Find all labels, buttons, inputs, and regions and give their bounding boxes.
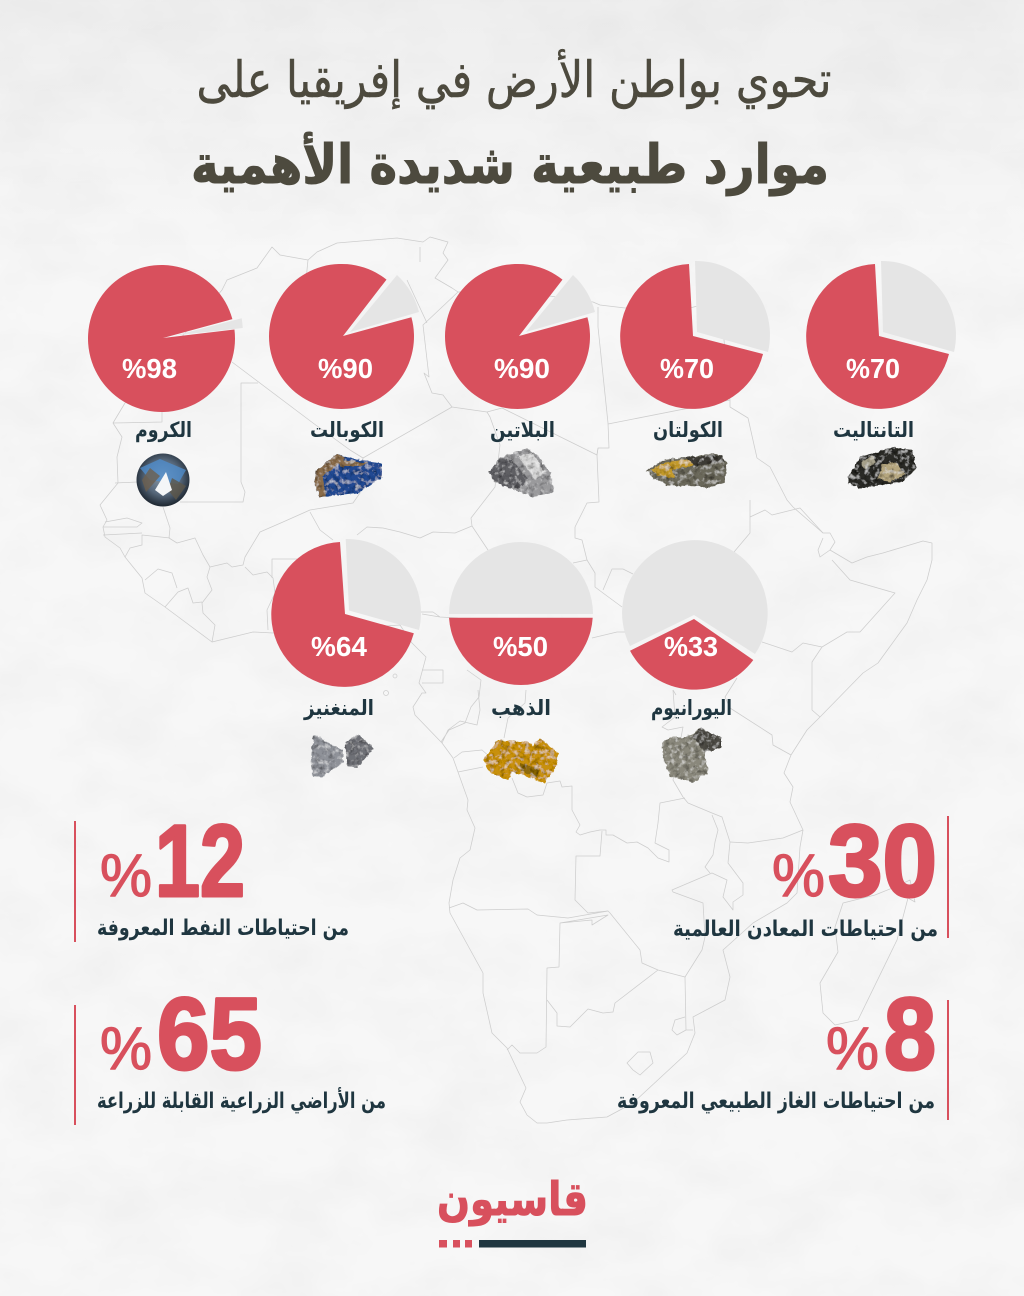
pie: tantalite 70%: %70 (846, 353, 900, 384)
icon: uranium ore (662, 728, 722, 782)
stat: 12% of oil reserves: من احتياطات النفط المعروفة (97, 916, 349, 941)
stat: 12% of oil reserves: % (100, 842, 152, 909)
label: platinum: البلاتين (490, 418, 555, 442)
pie: manganese 64%: %64 (311, 631, 368, 662)
title line 2: موارد طبيعية شديدة الأهمية (191, 132, 829, 196)
pie: platinum 90% (445, 264, 595, 409)
pie: coltan 70% (620, 261, 770, 409)
icon: cobalt ore (314, 454, 382, 497)
label: cobalt: الكوبالت (310, 418, 384, 442)
icon: tantalite ore (848, 447, 917, 488)
stat: 65% of arable land (74, 977, 386, 1125)
icon: platinum ore (489, 448, 554, 497)
icon: gold nugget (483, 738, 558, 783)
icon: coltan ore (647, 453, 727, 487)
stat: 65% of arable land: 65 (157, 977, 262, 1091)
logo (437, 1172, 588, 1248)
label: coltan: الكولتان (653, 418, 723, 442)
stat: 12% of oil reserves (74, 804, 349, 942)
pie: cobalt 90%: %90 (318, 353, 373, 384)
pie: cobalt 90% (269, 264, 419, 409)
icon: chromium ore (136, 454, 190, 506)
stat: 8% of natural gas reserves: من احتياطات الغاز الطبيعي المعروفة (617, 1089, 935, 1114)
label: tantalite: التانتاليت (833, 418, 914, 442)
label: chromium: الكروم (135, 418, 192, 442)
pie: manganese 64% (271, 539, 421, 687)
title line 1: تحوي بواطن الأرض في إفريقيا على (196, 49, 832, 110)
pie: uranium 33%: %33 (664, 631, 718, 662)
icon: manganese ore (311, 735, 374, 777)
stat: 12% of oil reserves: 12 (155, 804, 245, 918)
label: gold: الذهب (491, 696, 551, 720)
pie: gold 50%: %50 (493, 631, 548, 662)
stat: 30% of mineral reserves: من احتياطات المعادن العالمية (673, 917, 938, 942)
stat: 65% of arable land: من الأراضي الزراعية القابلة للزراعة (97, 1086, 386, 1114)
stat: 30% of mineral reserves: % (772, 842, 825, 909)
logo: قاسيون (437, 1172, 588, 1226)
pie: coltan 70%: %70 (660, 353, 714, 384)
stat: 8% of natural gas reserves: 8 (884, 977, 936, 1091)
title (191, 49, 832, 196)
pie: gold 50% (449, 542, 593, 685)
stat: 30% of mineral reserves (673, 804, 949, 942)
stat: 8% of natural gas reserves: % (826, 1015, 879, 1082)
pie: platinum 90%: %90 (494, 353, 550, 384)
pie: tantalite 70% (806, 261, 956, 409)
map of Africa with country borders (100, 237, 932, 1123)
pie: chromium 98% (88, 265, 243, 412)
pie: uranium 33% (622, 540, 768, 690)
stat: 8% of natural gas reserves (617, 977, 949, 1120)
stat: 30% of mineral reserves: 30 (828, 804, 937, 918)
label: uranium: اليورانيوم (651, 696, 732, 720)
pie: chromium 98%: %98 (122, 353, 177, 384)
label: manganese: المنغنيز (303, 696, 374, 720)
stat: 65% of arable land: % (100, 1015, 152, 1082)
